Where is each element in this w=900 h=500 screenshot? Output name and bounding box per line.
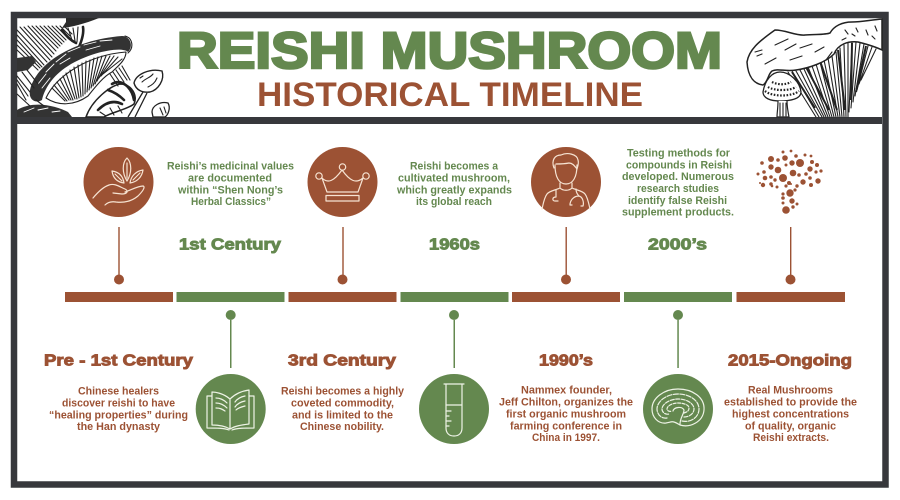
text block: 1990s description — [499, 384, 633, 444]
icon: reishi mushroom — [643, 374, 713, 444]
text block: pre-1st century description — [49, 386, 188, 433]
text block: pre-1st century description: Chinese healers — [78, 386, 159, 398]
connector: 2015-ongoing — [786, 227, 796, 284]
connector: 1st century — [226, 310, 236, 368]
text block: 1990s description: first organic mushroom — [506, 408, 626, 420]
connector: 1990s — [561, 227, 571, 284]
icon: reishi dot cluster — [756, 150, 823, 214]
text block: 1960s description: cultivated mushroom, — [398, 172, 510, 184]
text block: 2015-ongoing description: highest concentrations — [732, 408, 849, 420]
text block: 2000s description — [622, 148, 734, 218]
illustration: chanterelle mushrooms right — [747, 19, 882, 117]
text block: 1990s description: Nammex founder, — [521, 384, 612, 396]
text block: 2000s description: developed. Numerous — [622, 171, 734, 183]
icon: open book — [196, 374, 266, 444]
text block: 1st century description: Herbal Classics” — [191, 196, 271, 208]
connector: 2000s — [673, 310, 683, 368]
text block: 1st century description: within “Shen Nong’s — [177, 184, 283, 196]
heading: Historical Timeline: HISTORICAL TIMELINE — [257, 76, 643, 114]
text block: 1960s description: its global reach — [416, 196, 492, 208]
text block: pre-1st century description: the Han dynasty — [77, 421, 161, 433]
text block: 3rd century description: Reishi becomes a highly — [281, 386, 405, 398]
heading: 1960s: 1960s — [429, 236, 480, 254]
heading: Reishi Mushroom: REISHI MUSHROOM — [177, 22, 722, 79]
text block: 2015-ongoing description: established to provide the — [724, 396, 857, 408]
text block: 1990s description: farming conference in — [510, 420, 622, 432]
connector: 3rd century — [338, 227, 348, 284]
text block: 2000s description: research studies — [637, 183, 719, 195]
text block: 1st century description: Reishi’s medicinal values — [167, 160, 294, 172]
text block: 3rd century description — [281, 386, 405, 433]
timeline bar — [65, 292, 845, 302]
icon: crown — [308, 147, 378, 217]
heading: 3rd century: 3rd Century — [288, 352, 396, 370]
text block: 2015-ongoing description: Real Mushrooms — [748, 384, 833, 396]
text block: 3rd century description: Chinese nobility. — [300, 421, 384, 433]
title — [177, 22, 722, 114]
icon: hand holding plant — [84, 147, 154, 217]
text block: 1960s description — [396, 160, 512, 208]
text block: 1st century description: are documented — [188, 172, 272, 184]
illustration: oyster mushrooms left — [17, 18, 169, 117]
heading: pre-1st century: Pre - 1st Century — [44, 352, 193, 370]
text block: 2000s description: identify false Reishi — [628, 195, 727, 207]
icon: test tube — [419, 374, 489, 444]
text block: 3rd century description: coveted commodity, — [291, 398, 394, 410]
text block: 2000s description: supplement products. — [622, 206, 734, 218]
text block: 3rd century description: and is limited to the — [292, 410, 393, 422]
text block: 1990s description: China in 1997. — [532, 432, 600, 444]
text block: 2000s description: Testing methods for — [627, 148, 731, 160]
heading: 1990s: 1990’s — [539, 352, 593, 370]
text block: pre-1st century description: discover reishi to have — [62, 398, 175, 410]
text block: 2015-ongoing description — [724, 384, 857, 444]
heading: 2015-ongoing: 2015-Ongoing — [728, 352, 852, 370]
text block: 1st century description — [167, 160, 294, 208]
connector: pre-1st century — [114, 227, 124, 284]
text block: pre-1st century description: “healing properties” during — [49, 410, 188, 422]
text block: 1960s description: Reishi becomes a — [410, 160, 499, 172]
text block: 2000s description: compounds in Reishi — [626, 160, 732, 172]
heading: 2000s: 2000’s — [648, 236, 707, 254]
heading: 1st century: 1st Century — [179, 236, 281, 254]
connector: 1960s — [449, 310, 459, 368]
text block: 2015-ongoing description: Reishi extracts. — [753, 432, 829, 444]
text block: 2015-ongoing description: of quality, organic — [745, 420, 836, 432]
text block: 1990s description: Jeff Chilton, organizes the — [499, 396, 633, 408]
text block: 1960s description: which greatly expands — [396, 184, 512, 196]
icon: doctor — [531, 147, 601, 217]
